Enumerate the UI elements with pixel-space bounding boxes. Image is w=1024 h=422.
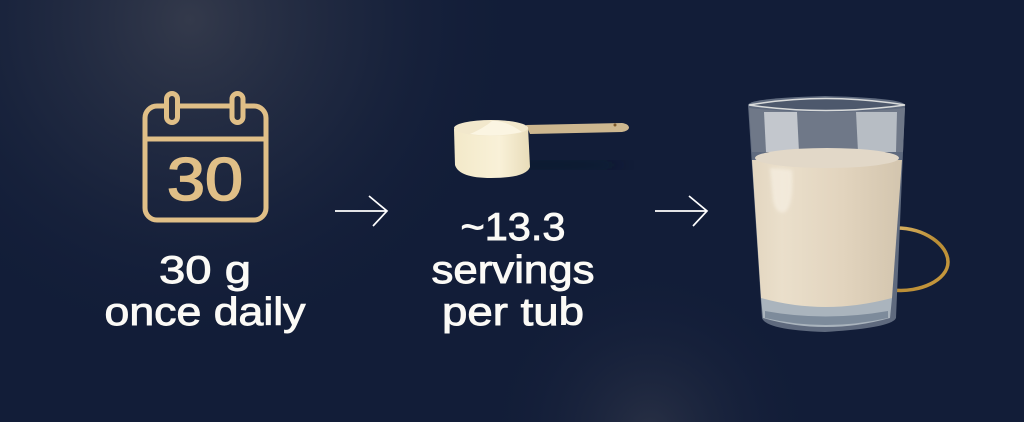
label: servings per tub: per tub: [442, 291, 584, 334]
label: 30 g once daily: once daily: [104, 291, 306, 334]
illustration: glass of milk: [748, 96, 948, 332]
handle: [893, 228, 948, 290]
glass base: [761, 298, 892, 327]
label: servings per tub: ~13.3: [460, 206, 566, 249]
label: servings per tub: servings: [432, 249, 594, 292]
arrow: second: [655, 196, 707, 226]
label: servings per tub: [432, 206, 594, 334]
label: 30 g once daily: [104, 249, 306, 334]
icon: calendar: [145, 94, 266, 220]
glass body: [748, 96, 905, 332]
milk: [752, 160, 902, 308]
icon: calendar: 30: [167, 146, 243, 213]
label: 30 g once daily: 30 g: [159, 249, 251, 292]
icon: scoop: [454, 120, 629, 178]
arrow: first: [335, 196, 387, 226]
